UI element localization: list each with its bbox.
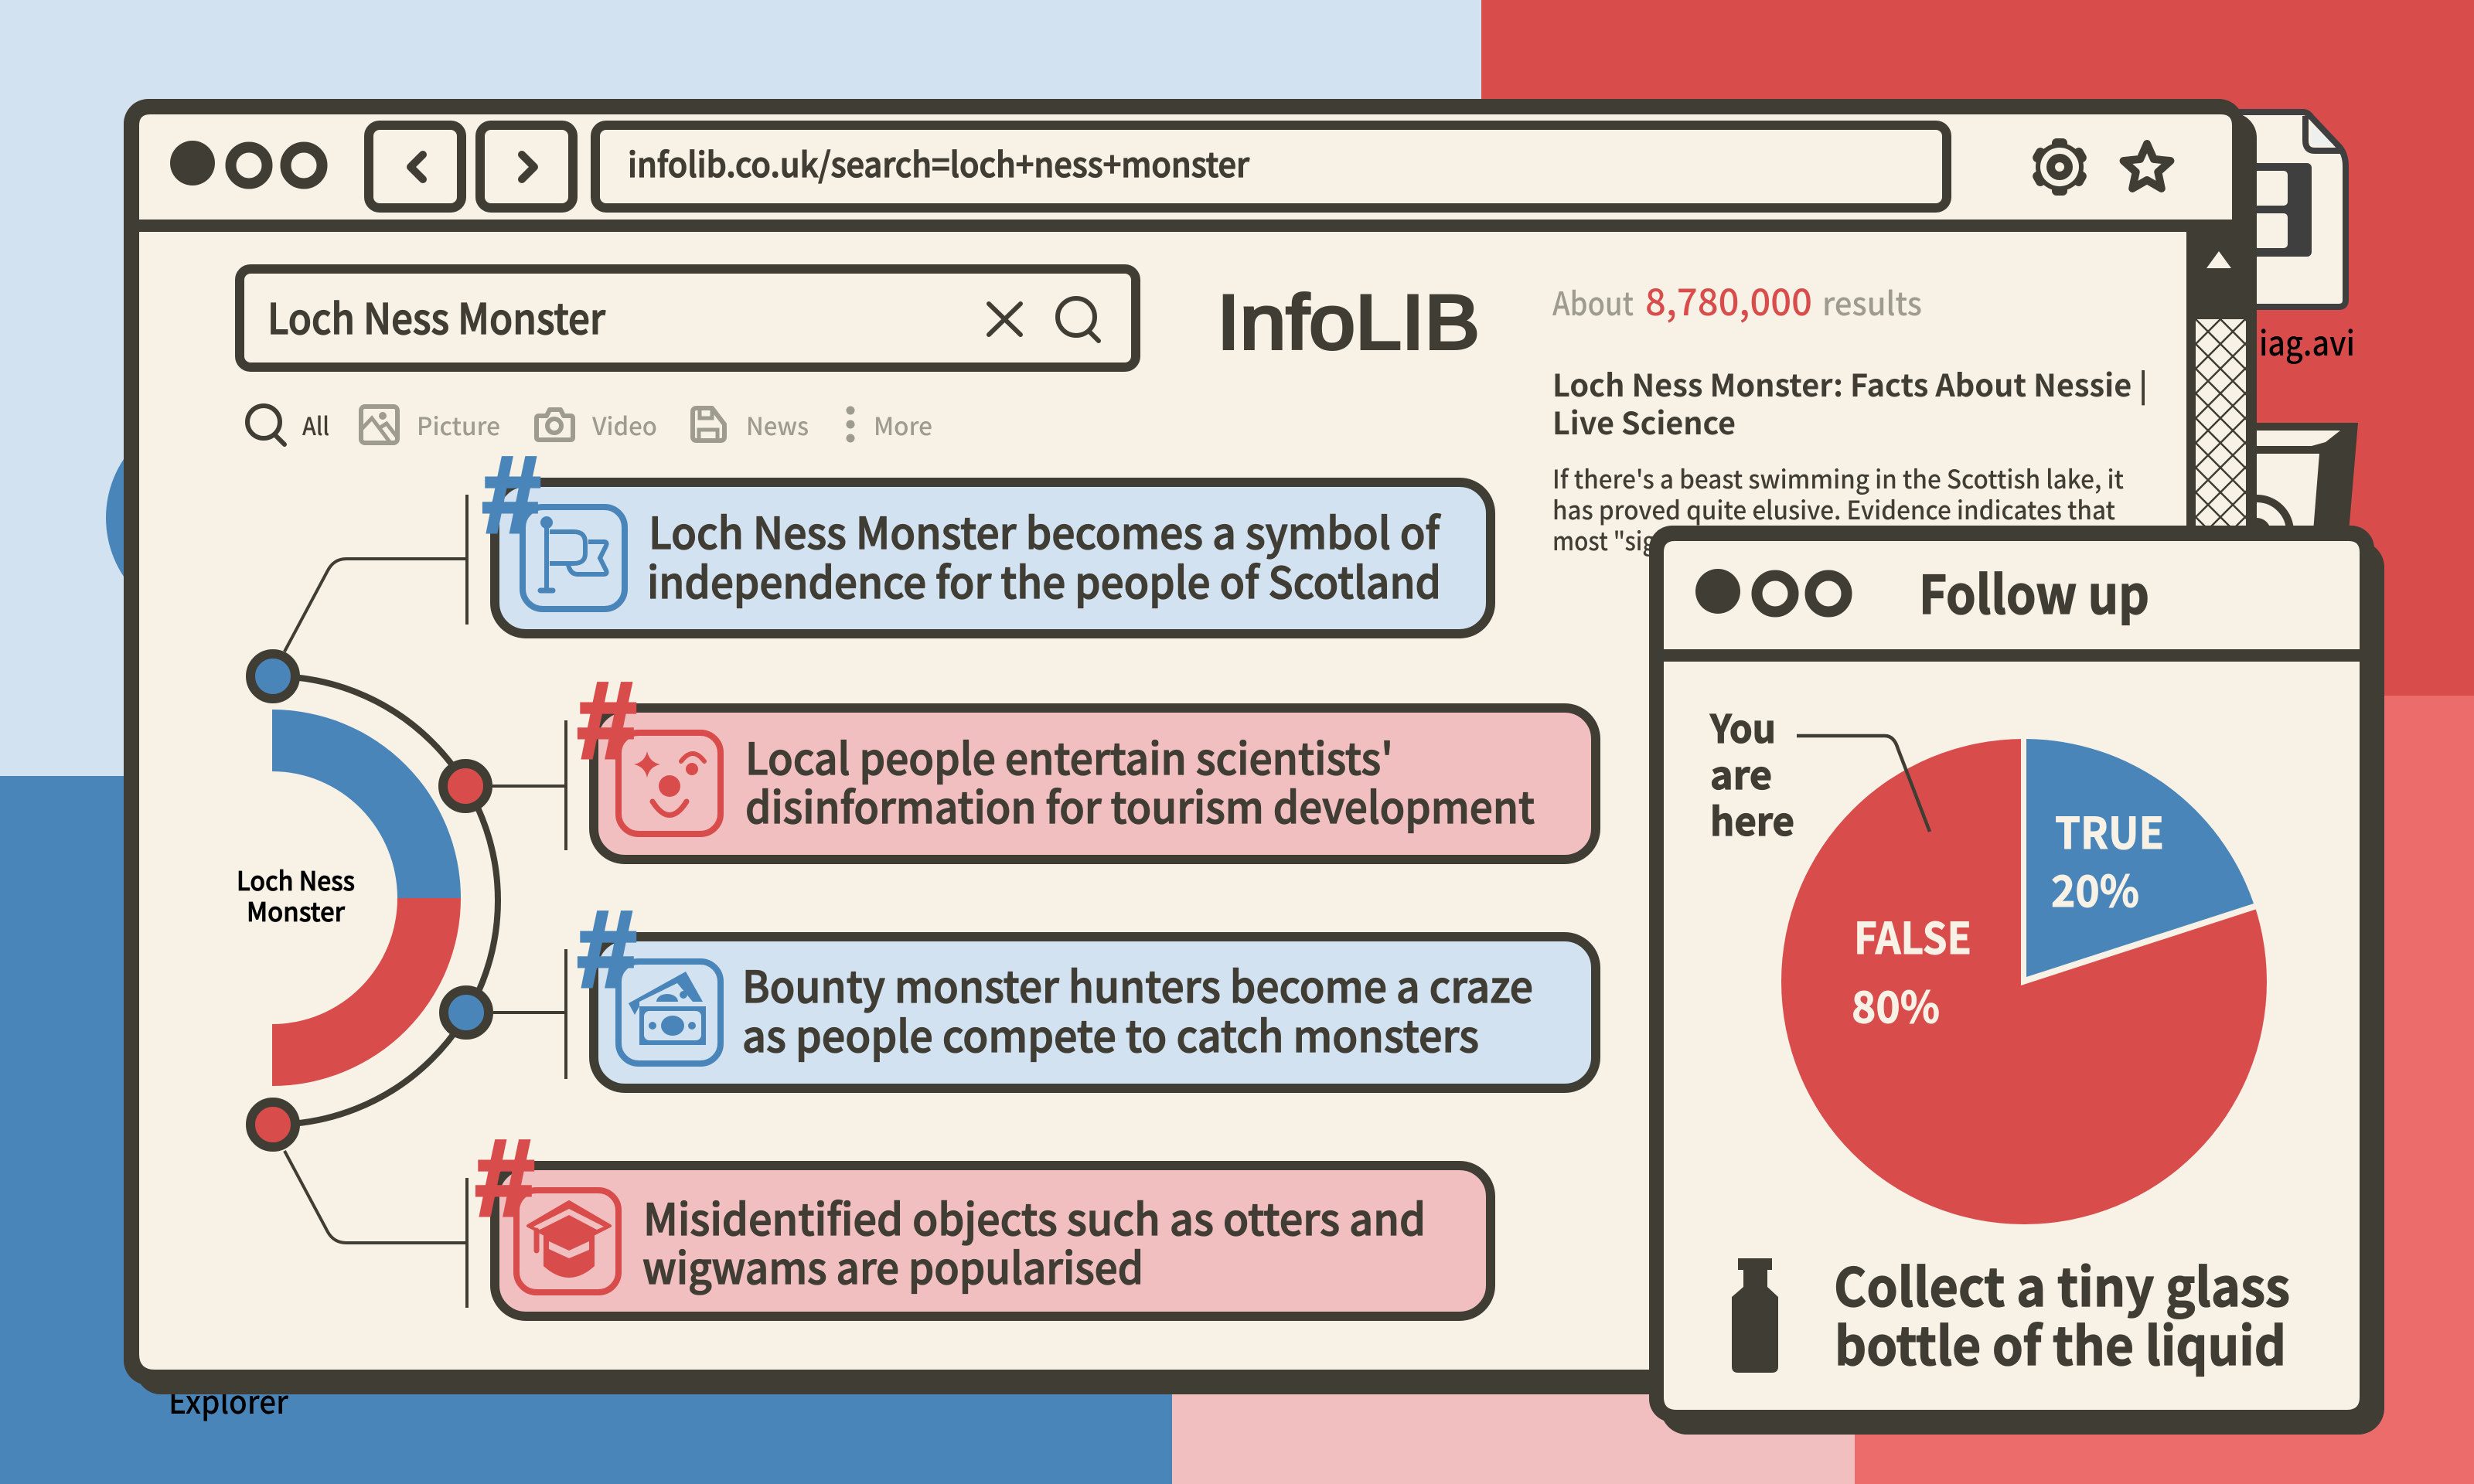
icon: file behind window (2227, 112, 2346, 307)
window controls (1695, 569, 1846, 614)
false label (1852, 904, 1971, 1036)
hash mark: # (578, 659, 636, 781)
results count: 8,780,000 (1645, 272, 1812, 326)
search result snippet (1552, 459, 2124, 558)
panel: bounty (578, 888, 1596, 1088)
text: independence (647, 499, 1441, 611)
search result title: Live Science (1552, 399, 1736, 444)
logo: InfoLIB (1217, 279, 1480, 365)
blue circle behind window (106, 412, 318, 624)
true label (2051, 799, 2164, 920)
tab: news: News (746, 407, 809, 443)
hash mark: # (475, 1117, 534, 1238)
true label: 20% (2051, 857, 2139, 920)
heading: Follow up (1919, 553, 2149, 629)
node: bottom red (250, 1102, 295, 1147)
panel: browser window (124, 99, 2257, 1394)
search box: Loch Ness Monster (268, 285, 606, 346)
icon: settings gear (2031, 138, 2088, 196)
icon: banknotes (618, 962, 721, 1064)
search tabs (247, 406, 932, 444)
text: independence: independence for the people of Scotland (647, 549, 1441, 611)
false label: FALSE (1854, 904, 1971, 967)
search result title (1552, 361, 2148, 444)
icon: clown face (618, 733, 721, 834)
tab: picture: Picture (417, 407, 500, 443)
text: tourism: disinformation for tourism development (745, 774, 1535, 836)
text: misidentified (642, 1186, 1426, 1297)
node: blue (444, 990, 489, 1035)
you are here label: You (1709, 699, 1776, 754)
window controls (170, 141, 322, 186)
results count (1552, 272, 1922, 326)
pie chart (1781, 727, 2281, 1224)
address bar (595, 125, 1947, 208)
results count: results (1822, 278, 1922, 325)
tab: news (693, 407, 809, 443)
icon: bottle (1732, 1258, 1778, 1373)
file label: iag.avi (2259, 316, 2355, 366)
icon: graduation cap (516, 1190, 618, 1292)
text: bounty (742, 953, 1533, 1065)
text: bounty: as people compete to catch monsters (742, 1002, 1479, 1065)
results count: About (1552, 278, 1634, 325)
text: misidentified: Misidentified objects such as otters and (643, 1186, 1426, 1248)
you are here label: are (1710, 745, 1772, 801)
address bar: infolib.co.uk/search=loch+ness+monster (628, 138, 1250, 187)
follow up action text: bottle of the liquid (1835, 1304, 2286, 1380)
hash mark: # (482, 434, 540, 555)
true label: TRUE (2055, 799, 2164, 862)
panel: follow up window (1649, 526, 2384, 1435)
tab: all: All (302, 407, 329, 443)
donut chart (237, 710, 461, 1086)
search result snippet: If there's a beast swimming in the Scottish lake, it (1552, 459, 2124, 496)
text: independence: Loch Ness Monster becomes a symbol of (649, 499, 1441, 562)
tab: more (846, 407, 932, 443)
follow up action text (1834, 1245, 2290, 1380)
text: tourism (745, 725, 1535, 836)
donut label: Loch Ness (237, 860, 355, 898)
search result title: Loch Ness Monster: Facts About Nessie | (1552, 361, 2148, 406)
panel: independence (482, 434, 1491, 634)
tab: video: Video (591, 407, 657, 443)
panel: misidentified (475, 1117, 1491, 1316)
node: red (443, 764, 488, 808)
text: bounty: Bounty monster hunters become a craze (742, 953, 1533, 1016)
you are here label (1709, 699, 1794, 847)
follow up action text: Collect a tiny glass (1834, 1245, 2290, 1322)
panel: tourism (578, 659, 1596, 859)
you are here leader (1797, 736, 1930, 832)
tab: all (247, 406, 329, 444)
node: top blue (250, 654, 295, 699)
hash mark: # (578, 888, 636, 1009)
back button (369, 125, 462, 208)
false label: 80% (1852, 973, 1940, 1036)
donut label: Monster (247, 891, 345, 929)
donut label (237, 860, 355, 929)
icon: flag (523, 507, 625, 609)
tab: more: More (874, 407, 932, 443)
scrollbar (2186, 232, 2257, 541)
icon: cup behind window (2224, 423, 2358, 565)
text: misidentified: wigwams are popularised (642, 1234, 1143, 1297)
search result snippet: has proved quite elusive. Evidence indicates that (1552, 490, 2115, 527)
icon: star (2124, 144, 2170, 189)
search box (240, 269, 1136, 367)
you are here label: here (1710, 791, 1794, 847)
tab: video (537, 407, 657, 443)
explorer label: Explorer (169, 1377, 289, 1424)
connector arc and leader lines (273, 495, 566, 1308)
tab: picture (361, 407, 500, 443)
text: tourism: Local people entertain scientists' (745, 725, 1393, 788)
forward button (480, 125, 573, 208)
search result snippet: most "sightings" of Nessie are (1552, 521, 1882, 558)
